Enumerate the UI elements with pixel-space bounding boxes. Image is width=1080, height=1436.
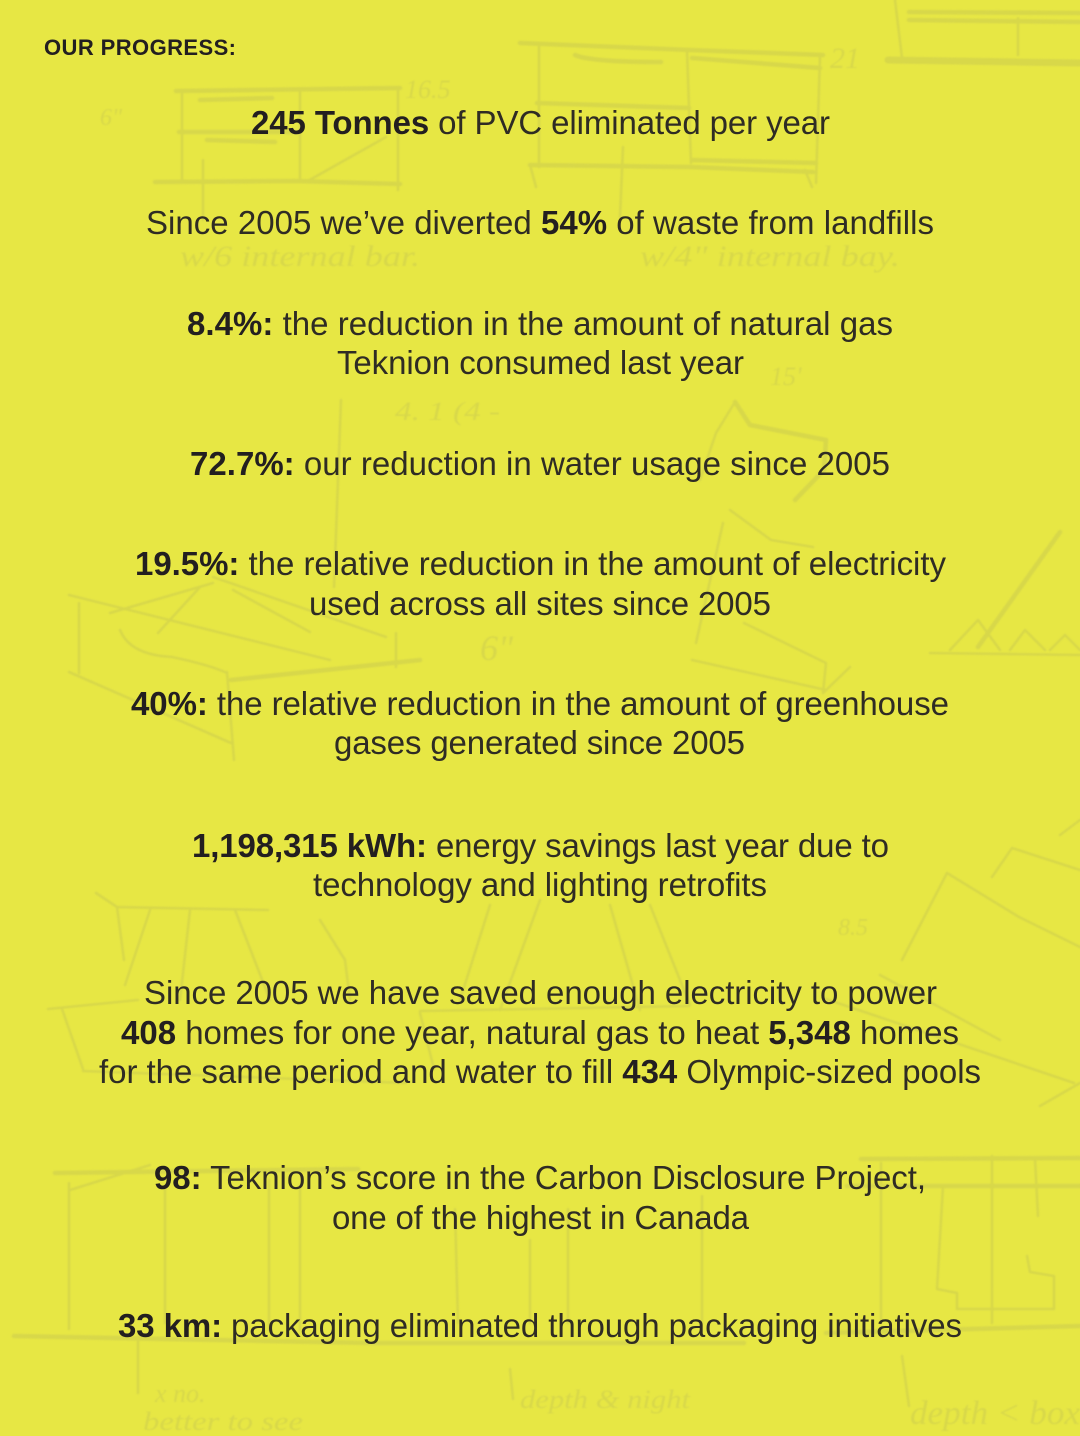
stat: natural gas reduction: Teknion consumed last year (337, 344, 744, 381)
sketch handwriting: w/6 internal bar. (180, 240, 420, 273)
sketch handwriting: 6" (480, 628, 514, 668)
sketch handwriting: 16.5 (405, 75, 450, 104)
stat: waste diverted: Since 2005 we’ve diverted 54% of waste from landfills (146, 204, 934, 241)
sketch handwriting: w/4" internal bay. (640, 240, 900, 273)
sketch handwriting: depth & night (520, 1385, 691, 1414)
sketch handwriting: 4. 1 (4 - (395, 397, 500, 426)
stat: carbon disclosure score: 98: Teknion’s score in the Carbon Disclosure Project, (154, 1159, 926, 1196)
sketch handwriting: 6" (100, 105, 123, 131)
stat: carbon disclosure score (154, 1159, 926, 1236)
stat: electricity reduction: used across all sites since 2005 (309, 585, 771, 622)
stat: greenhouse gases (131, 685, 949, 761)
stat: equivalents since 2005: Since 2005 we have saved enough electricity to power (144, 974, 937, 1011)
stat: electricity reduction (135, 545, 946, 622)
stat: equivalents since 2005 (99, 974, 981, 1090)
stat: equivalents since 2005: 408 homes for one year, natural gas to heat 5,348 homes (121, 1014, 959, 1051)
sketch handwriting: better to see (143, 1407, 303, 1436)
sketch handwriting: x no. (154, 1379, 206, 1408)
stat: packaging eliminated: 33 km: packaging eliminated through packaging initiatives (118, 1307, 962, 1344)
heading: OUR PROGRESS: (44, 35, 236, 60)
stat: equivalents since 2005: for the same period and water to fill 434 Olympic-sized pools (99, 1053, 981, 1090)
stat: greenhouse gases: gases generated since 2005 (334, 724, 745, 761)
sketch handwriting: 8.5 (838, 915, 868, 941)
stat: natural gas reduction (187, 305, 893, 381)
stat: energy savings: technology and lighting retrofits (313, 866, 767, 903)
sketch handwriting: depth < box (910, 1395, 1080, 1432)
sketch handwriting: 21 (830, 42, 860, 75)
sketch handwriting: 15' (770, 362, 802, 391)
stat: energy savings (192, 827, 889, 903)
stat: carbon disclosure score: one of the highest in Canada (332, 1199, 750, 1236)
stat: electricity reduction: 19.5%: the relative reduction in the amount of electricity (135, 545, 946, 582)
stat: energy savings: 1,198,315 kWh: energy savings last year due to (192, 827, 889, 864)
stat: PVC eliminated: 245 Tonnes of PVC eliminated per year (251, 104, 830, 141)
stat: water usage: 72.7%: our reduction in water usage since 2005 (190, 445, 890, 482)
stat: natural gas reduction: 8.4%: the reduction in the amount of natural gas (187, 305, 893, 342)
stat: greenhouse gases: 40%: the relative reduction in the amount of greenhouse (131, 685, 949, 722)
